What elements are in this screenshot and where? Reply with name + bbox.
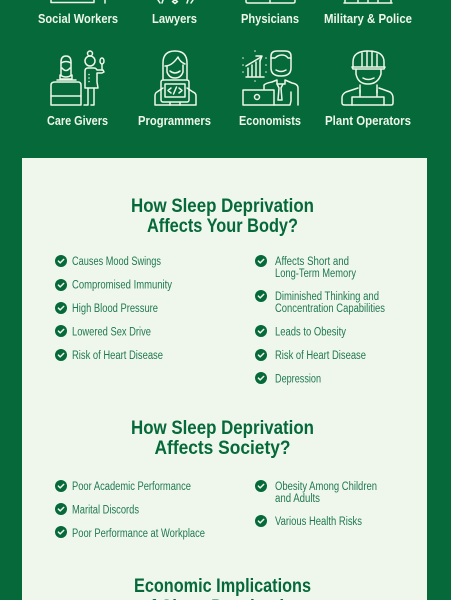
list: body effects left: Lowered Sex Drive: [72, 326, 151, 338]
list: body effects right: Diminished Thinking and: [275, 291, 379, 303]
icon: economist: [243, 51, 298, 105]
list: society effects left: Poor Academic Performance: [72, 481, 191, 493]
list: body effects right: Leads to Obesity: [275, 326, 346, 338]
panel: sleep deprivation effects: [22, 158, 427, 600]
icon: physician, cropped: [246, 0, 295, 3]
list: body effects left: [55, 255, 172, 362]
list: body effects right: Concentration Capabilities: [275, 303, 385, 315]
list: society effects left: Marital Discords: [72, 504, 139, 516]
heading: economic implications: Economic Implications: [134, 576, 311, 597]
icon: lawyer, cropped: [158, 0, 193, 4]
list: body effects left: Compromised Immunity: [72, 280, 172, 292]
heading: affects your body: Affects Your Body?: [147, 216, 298, 237]
list: society effects right: Obesity Among Children: [275, 481, 377, 493]
icon: programmer: [155, 51, 196, 105]
list: body effects right: [255, 255, 385, 386]
list: body effects left: Causes Mood Swings: [72, 256, 161, 268]
icon: care giver: [51, 51, 104, 105]
label: Social Workers: Social Workers: [38, 12, 118, 26]
list: society effects right: and Adults: [275, 493, 320, 505]
label: Care Givers: Care Givers: [47, 114, 108, 128]
label: Lawyers: Lawyers: [152, 12, 197, 26]
list: society effects right: Various Health Risks: [275, 516, 362, 528]
label: Programmers: Programmers: [138, 114, 211, 128]
label: Plant Operators: Plant Operators: [325, 114, 411, 128]
heading: affects your body: How Sleep Deprivation: [131, 196, 314, 217]
list: body effects right: Long-Term Memory: [275, 268, 356, 280]
list: body effects right: Risk of Heart Disease: [275, 350, 366, 362]
icon: plant operator: [342, 51, 393, 105]
label: Physicians: Physicians: [241, 12, 299, 26]
panel: professions: [38, 0, 412, 128]
list: society effects right: [255, 480, 377, 528]
heading: affects society: How Sleep Deprivation: [131, 418, 314, 439]
list: society effects left: Poor Performance at Workplace: [72, 528, 205, 540]
list: body effects right: Affects Short and: [275, 256, 349, 268]
label: Economists: Economists: [239, 114, 301, 128]
list: body effects left: Risk of Heart Disease: [72, 350, 163, 362]
list: society effects left: [55, 480, 205, 540]
label: Military & Police: Military & Police: [324, 12, 412, 26]
list: body effects right: Depression: [275, 374, 321, 386]
icon: social worker, cropped: [51, 0, 105, 3]
icon: military, cropped: [344, 0, 392, 3]
heading: affects society: Affects Society?: [154, 438, 290, 459]
list: body effects left: High Blood Pressure: [72, 303, 158, 315]
